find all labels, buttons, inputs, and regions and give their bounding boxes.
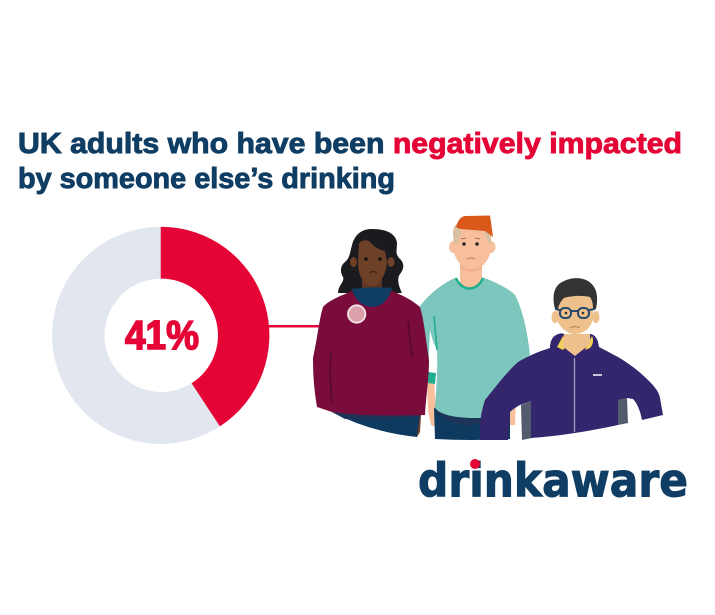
title: UK adults who have been negatively impacted (18, 128, 682, 160)
person: man in teal sweater (420, 216, 530, 440)
person: woman in maroon sweater (313, 229, 429, 437)
person: man in purple jacket with glasses (480, 278, 663, 440)
title (18, 128, 682, 195)
logo: drinkaware: drinkaware (418, 454, 688, 508)
donut chart: 41% (52, 227, 269, 444)
connector line (268, 325, 322, 328)
badge (348, 305, 365, 323)
title: by someone else’s drinking (18, 163, 395, 195)
donut chart: 41%: 41% (125, 312, 199, 358)
